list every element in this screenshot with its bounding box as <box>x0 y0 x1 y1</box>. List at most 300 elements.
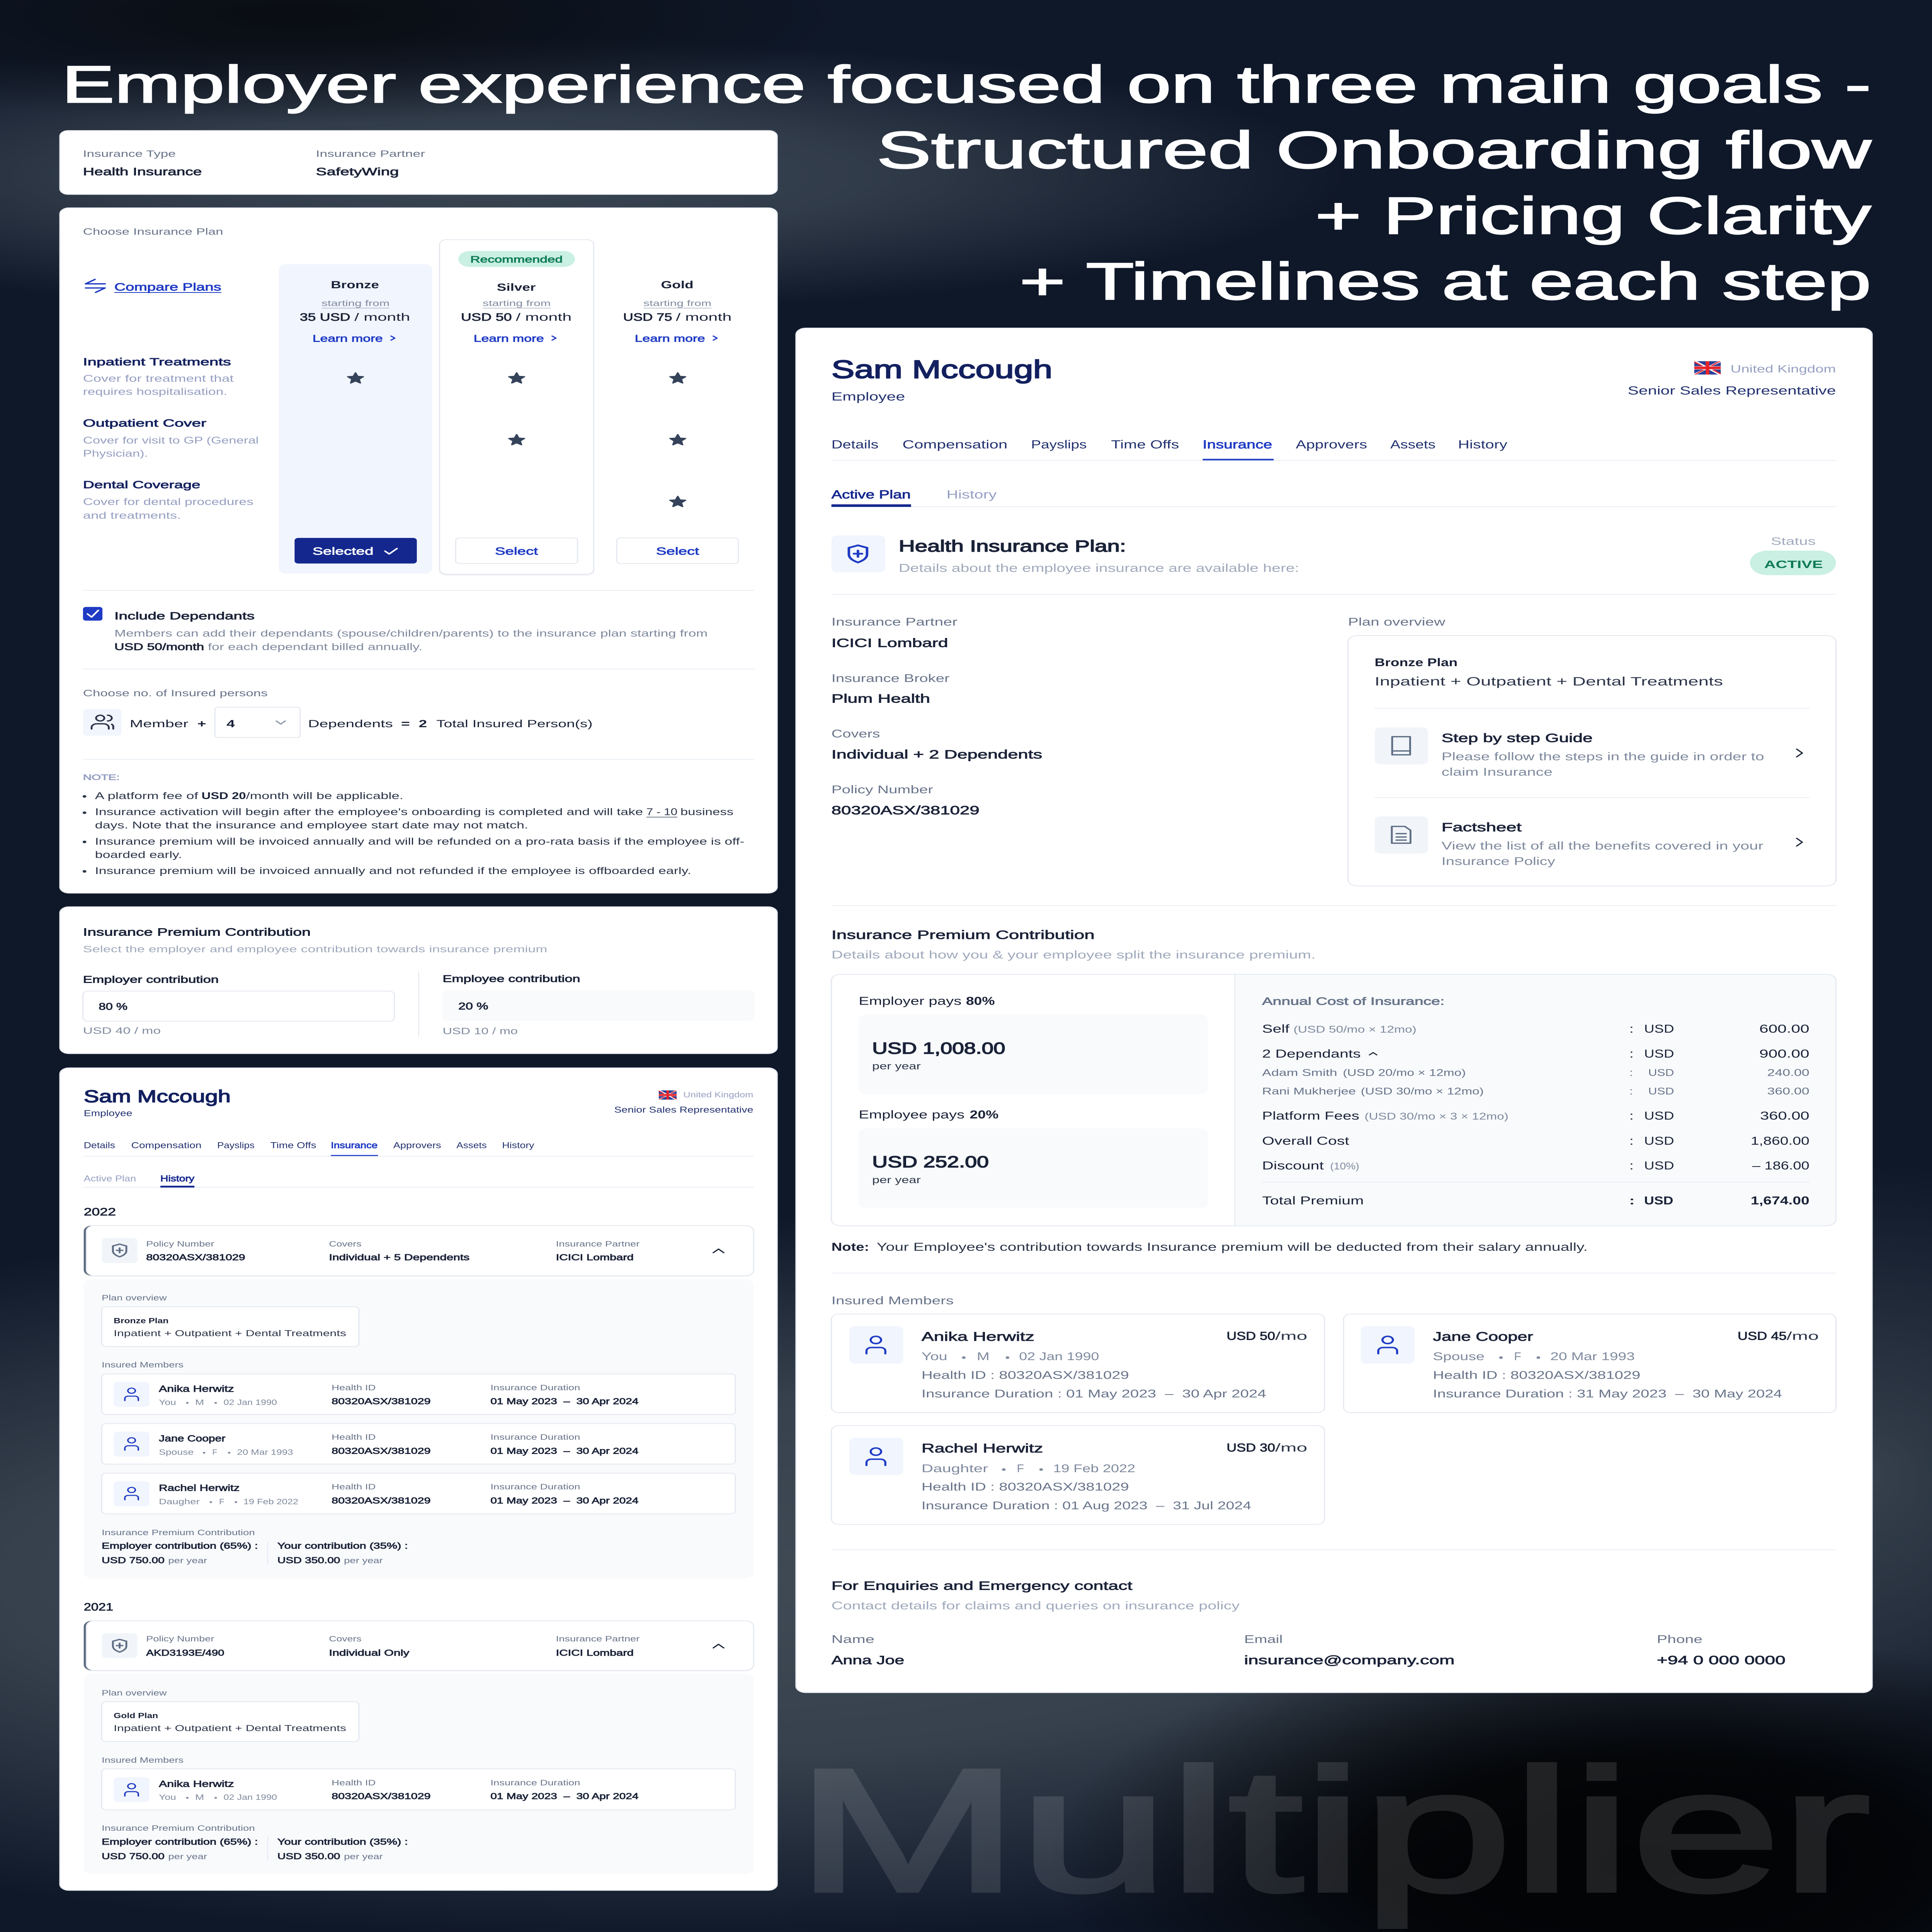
field: employee contribution: 20 % <box>458 1001 488 1012</box>
policy facts: Policy Number <box>832 783 933 796</box>
member card: Jane Cooper <box>1344 1314 1836 1413</box>
insured person selector: Total Insured Person(s) <box>436 718 592 730</box>
policy summary card: ICICI Lombard <box>556 1252 634 1262</box>
member card: Rachel Herwitz: USD 30 <box>1226 1441 1275 1454</box>
annual cost table: 360.00 <box>1760 1109 1810 1122</box>
policy facts: ICICI Lombard <box>832 636 948 650</box>
field: employer contribution: 80 % <box>99 1001 128 1012</box>
section heading: insurance premium contribution: Details about how you & your employee split the insurance premium. <box>832 949 1316 961</box>
plan column: silver: Select <box>495 546 538 557</box>
policy facts: Insurance Broker <box>832 672 950 684</box>
member card: Anika Herwitz: 02 Jan 1990 <box>1019 1350 1099 1363</box>
annual cost table: : <box>1629 1067 1633 1078</box>
insured person selector <box>83 688 592 738</box>
annual cost table: 2 Dependants <box>1262 1047 1361 1060</box>
plan column: bronze: Selected <box>313 546 374 557</box>
contribution split: Employer contribution (65%) : <box>102 1837 258 1847</box>
employer share <box>859 995 1208 1094</box>
sub tabs: History <box>160 1173 194 1183</box>
member row: Jane Cooper: Spouse <box>159 1448 194 1457</box>
plan heading: Health Insurance Plan: <box>899 537 1126 555</box>
navigation tabs: Time Offs <box>1111 438 1179 451</box>
member row: Anika Herwitz: Anika Herwitz <box>159 1779 234 1789</box>
plan column: gold: Learn more <box>635 333 705 344</box>
insured person selector: = <box>401 718 410 730</box>
history year 2021 <box>84 1601 753 1874</box>
contribution split: per year <box>168 1556 207 1565</box>
expanded policy details: Plan overview <box>102 1294 167 1302</box>
checkbox: include dependants: Include Dependants <box>114 611 255 622</box>
annual cost table: : <box>1629 1085 1633 1097</box>
member row: Anika Herwitz: 02 Jan 1990 <box>224 1793 277 1802</box>
note: Note: <box>832 1241 869 1253</box>
member row: Jane Cooper: 20 Mar 1993 <box>237 1448 293 1457</box>
member card: Rachel Herwitz: /mo <box>1275 1441 1307 1454</box>
insured members <box>832 1294 1836 1524</box>
expanded policy details: Insured Members <box>102 1361 184 1369</box>
contribution split: per year <box>344 1556 383 1565</box>
annual cost table <box>1262 995 1810 1207</box>
member card: Rachel Herwitz: Rachel Herwitz <box>922 1442 1043 1455</box>
history year 2021: 2021 <box>84 1601 113 1613</box>
heading: choose insurance plan: Choose Insurance Plan <box>83 227 223 237</box>
member card: Anika Herwitz: USD 50 <box>1226 1330 1275 1342</box>
plan column: bronze: 35 USD <box>300 311 350 323</box>
checkbox: include dependants: for each dependant billed annually. <box>208 641 422 652</box>
plan column: bronze <box>279 264 432 573</box>
expanded policy details <box>84 1279 753 1578</box>
title <box>62 55 1871 311</box>
contribution split: Your contribution (35%) : <box>277 1541 408 1551</box>
plan overview: Plan overview <box>1348 616 1446 628</box>
member card: Jane Cooper: Insurance Duration : 31 May 2023 – 30 May 2024 <box>1433 1388 1782 1400</box>
annual cost table: Annual Cost of Insurance: <box>1262 995 1444 1007</box>
employee header <box>84 1087 753 1118</box>
plan overview box: Gold Plan <box>114 1712 158 1720</box>
policy summary card: Policy Number <box>146 1634 214 1643</box>
premium breakdown <box>832 974 1836 1226</box>
guide link: Step by step Guide <box>1442 731 1593 745</box>
notes list: A platform fee of <box>95 790 198 801</box>
member row: Anika Herwitz: M <box>195 1398 204 1407</box>
employer share: 80% <box>966 995 995 1007</box>
member row: Jane Cooper: Health ID <box>332 1433 376 1442</box>
notes list: 7 - 10 <box>646 806 677 817</box>
member card: Rachel Herwitz: Insurance Duration : 01 Aug 2023 – 31 Jul 2024 <box>922 1499 1251 1512</box>
annual cost table: : <box>1629 1134 1634 1147</box>
navigation tabs: Details <box>84 1141 115 1150</box>
employer share: USD 1,008.00 <box>872 1039 1005 1057</box>
contribution split: Insurance Premium Contribution <box>102 1528 255 1537</box>
member card: Rachel Herwitz: Daughter <box>922 1462 988 1475</box>
notes list: Insurance premium will be invoiced annually and not refunded if the employee is offboarded early. <box>95 865 691 876</box>
sub tabs <box>84 1173 753 1187</box>
enquiries and emergency contact: Anna Joe <box>832 1654 904 1667</box>
checkbox: include dependants <box>83 607 707 652</box>
member row: Rachel Herwitz: Rachel Herwitz <box>159 1483 240 1493</box>
contribution split: USD 350.00 <box>277 1555 340 1565</box>
plan heading <box>832 535 1299 574</box>
plan column: gold <box>617 279 738 563</box>
employee share <box>859 1108 1208 1208</box>
member row: Jane Cooper <box>102 1423 735 1464</box>
member row: Rachel Herwitz: Health ID <box>332 1483 376 1492</box>
checkbox: include dependants: USD 50/month <box>114 641 204 652</box>
policy summary card: Individual Only <box>329 1648 410 1658</box>
navigation tabs: Details <box>832 438 879 451</box>
navigation tabs: Insurance <box>331 1141 378 1150</box>
navigation tabs: Compensation <box>131 1141 201 1150</box>
panel: insurance premium contribution form: Select the employer and employee contribution towards insurance premium <box>83 944 547 954</box>
annual cost table: (10%) <box>1330 1161 1359 1172</box>
benefit list: and treatments. <box>83 510 181 521</box>
annual cost table: USD <box>1644 1134 1674 1147</box>
annual cost table: USD <box>1648 1085 1674 1097</box>
icon: book <box>1392 737 1410 755</box>
annual cost table: USD <box>1644 1159 1674 1172</box>
employee header: Senior Sales Representative <box>1628 384 1836 397</box>
member row: Jane Cooper: F <box>213 1448 217 1457</box>
notes list <box>83 773 744 876</box>
annual cost table: 900.00 <box>1759 1047 1810 1060</box>
policy facts: Covers <box>832 728 880 740</box>
plan column: silver <box>439 240 594 576</box>
plan column: bronze: / month <box>354 311 410 323</box>
title: + Timelines at each step <box>1019 252 1871 311</box>
navigation tabs: Payslips <box>1031 438 1087 451</box>
status badge <box>1750 535 1836 575</box>
insured person selector: Choose no. of Insured persons <box>83 688 268 699</box>
plan column: silver: Recommended <box>470 255 563 265</box>
notes list: boarded early. <box>95 849 182 860</box>
plan overview box: Bronze Plan <box>114 1317 168 1325</box>
employee header: Employee <box>84 1109 132 1118</box>
member row: Anika Herwitz: Insurance Duration <box>490 1779 580 1787</box>
contribution split <box>102 1528 408 1565</box>
plan column: silver: starting from <box>483 299 551 308</box>
plan column: gold: / month <box>676 311 731 323</box>
insured person selector: 4 <box>226 718 235 730</box>
annual cost table: USD <box>1644 1022 1674 1035</box>
title: + Pricing Clarity <box>1315 187 1871 245</box>
plan overview box <box>102 1702 359 1742</box>
policy facts: Individual + 2 Dependents <box>832 748 1042 761</box>
annual cost table: : <box>1629 1159 1634 1172</box>
member row: Anika Herwitz: You <box>159 1793 176 1802</box>
member row: Anika Herwitz: Health ID <box>332 1779 376 1787</box>
plan column: silver: USD 50 <box>461 311 512 323</box>
member row: Rachel Herwitz: 80320ASX/381029 <box>332 1496 431 1505</box>
annual cost table: : <box>1629 1194 1635 1207</box>
benefit list: Cover for visit to GP (General <box>83 435 259 446</box>
member card: Rachel Herwitz: 19 Feb 2022 <box>1053 1462 1135 1475</box>
panel: insurance type and partner <box>60 131 777 194</box>
plan column: silver: Silver <box>497 282 536 293</box>
plan column: silver: / month <box>516 311 571 323</box>
contribution split: USD 750.00 <box>102 1851 165 1861</box>
annual cost table: USD <box>1644 1109 1674 1122</box>
navigation tabs: Payslips <box>217 1141 255 1150</box>
employee share: USD 252.00 <box>872 1153 989 1171</box>
sub tabs: History <box>947 488 997 501</box>
member card: Jane Cooper: /mo <box>1787 1330 1819 1342</box>
benefit list <box>83 356 259 521</box>
factsheet link: View the list of all the benefits covered in your <box>1442 840 1764 852</box>
annual cost table: 1,674.00 <box>1751 1194 1810 1207</box>
field: employee contribution: Employee contribution <box>443 973 580 984</box>
annual cost table: 360.00 <box>1767 1085 1810 1097</box>
plan column: bronze: Bronze <box>331 279 379 291</box>
icon: people <box>92 715 113 729</box>
employee header: United Kingdom <box>684 1090 753 1099</box>
plan overview: Inpatient + Outpatient + Dental Treatments <box>1374 675 1723 688</box>
member card: Jane Cooper: Spouse <box>1433 1350 1485 1363</box>
contribution split: USD 350.00 <box>277 1851 340 1861</box>
member card: Anika Herwitz: Health ID : 80320ASX/381029 <box>922 1369 1129 1381</box>
contribution split: Insurance Premium Contribution <box>102 1824 255 1833</box>
member row: Anika Herwitz: 02 Jan 1990 <box>224 1398 277 1407</box>
link: compare plans: Compare Plans <box>114 281 221 293</box>
member row: Jane Cooper: 80320ASX/381029 <box>332 1446 431 1456</box>
member row: Rachel Herwitz: Insurance Duration <box>490 1483 580 1492</box>
notes list: Insurance activation will begin after the employee's onboarding is completed and will take <box>95 806 643 817</box>
navigation tabs: History <box>1458 438 1507 451</box>
policy summary card: Covers <box>329 1240 362 1248</box>
member card: Anika Herwitz: Anika Herwitz <box>922 1330 1034 1344</box>
section heading: insurance premium contribution: Insurance Premium Contribution <box>832 928 1095 942</box>
annual cost table: (USD 20/mo × 12mo) <box>1343 1067 1466 1078</box>
insured members: Insured Members <box>832 1294 954 1307</box>
factsheet link: Factsheet <box>1442 821 1522 834</box>
notes list: NOTE: <box>83 773 120 782</box>
policy summary card <box>84 1226 753 1277</box>
insured person selector: Member <box>130 718 189 730</box>
policy facts: 80320ASX/381029 <box>832 804 980 817</box>
annual cost table: Discount <box>1262 1159 1324 1172</box>
insured person selector: 2 <box>419 718 427 730</box>
expanded policy details: Insured Members <box>102 1756 184 1765</box>
benefit list: Inpatient Treatments <box>83 356 231 368</box>
field: employer contribution <box>83 974 395 1036</box>
title: Structured Onboarding flow <box>877 121 1871 179</box>
policy summary card: AKD3193E/490 <box>146 1648 224 1658</box>
benefit list: Physician). <box>83 448 148 459</box>
member card: Rachel Herwitz: Health ID : 80320ASX/381029 <box>922 1481 1129 1493</box>
annual cost table: USD <box>1648 1067 1674 1078</box>
enquiries and emergency contact: +94 0 000 0000 <box>1657 1654 1786 1667</box>
enquiries and emergency contact: Email <box>1244 1633 1282 1646</box>
navigation tabs <box>832 438 1836 460</box>
plan column: gold: Gold <box>661 279 694 291</box>
member row: Anika Herwitz: You <box>159 1398 176 1407</box>
expanded policy details <box>84 1674 753 1874</box>
employee header: Sam Mccough <box>832 355 1052 384</box>
employee header: Senior Sales Representative <box>614 1105 753 1114</box>
member row: Jane Cooper: Insurance Duration <box>490 1433 580 1442</box>
annual cost table: Platform Fees <box>1262 1109 1359 1122</box>
sub tabs: Active Plan <box>832 488 911 501</box>
plan column: gold: starting from <box>643 299 711 308</box>
benefit list: Dental Coverage <box>83 479 201 491</box>
member card: Jane Cooper: USD 45 <box>1738 1330 1787 1342</box>
section heading: insurance premium contribution <box>832 928 1316 961</box>
notes list: USD 20 <box>201 790 246 801</box>
insured person selector: Dependents <box>308 718 393 730</box>
policy summary card: Covers <box>329 1634 362 1643</box>
panel: choose insurance plan <box>60 208 777 893</box>
employee header: Sam Mccough <box>84 1087 231 1106</box>
plan column: bronze: Learn more <box>313 333 383 344</box>
guide link: Please follow the steps in the guide in order to <box>1442 750 1764 763</box>
policy summary card: 80320ASX/381029 <box>146 1252 245 1262</box>
policy summary card: Insurance Partner <box>556 1240 639 1248</box>
navigation tabs: Insurance <box>1202 438 1272 451</box>
sub tabs: Active Plan <box>84 1173 136 1183</box>
annual cost table: (USD 30/mo × 12mo) <box>1361 1085 1484 1097</box>
panel: insurance premium contribution form <box>60 907 777 1054</box>
member row: Jane Cooper: Jane Cooper <box>159 1433 225 1443</box>
annual cost table: 240.00 <box>1767 1067 1810 1078</box>
employee share: Employee pays <box>859 1108 964 1121</box>
benefit list: Cover for treatment that <box>83 373 234 384</box>
title: Employer experience focused on three main goals - <box>62 55 1871 114</box>
insured person selector: + <box>197 718 206 730</box>
policy summary card <box>84 1621 753 1672</box>
plan overview box: Inpatient + Outpatient + Dental Treatments <box>114 1723 346 1733</box>
member card: Anika Herwitz: M <box>977 1350 990 1363</box>
member row: Anika Herwitz: Health ID <box>332 1383 376 1392</box>
annual cost table: (USD 50/mo × 12mo) <box>1294 1024 1417 1035</box>
enquiries and emergency contact: insurance@company.com <box>1244 1654 1455 1667</box>
panel: employee insurance active plan <box>796 328 1872 1693</box>
checkbox: include dependants: Members can add their dependants (spouse/children/parents) to the insurance plan starting from <box>114 628 707 639</box>
member card: Anika Herwitz: Insurance Duration : 01 May 2023 – 30 Apr 2024 <box>922 1388 1266 1400</box>
history year 2022 <box>84 1206 753 1578</box>
plan overview box: Inpatient + Outpatient + Dental Treatments <box>114 1328 346 1338</box>
member card: Jane Cooper: Jane Cooper <box>1433 1330 1533 1344</box>
policy summary card: Individual + 5 Dependents <box>329 1252 469 1262</box>
policy summary card: ICICI Lombard <box>556 1648 634 1658</box>
employer share: Employer pays <box>859 995 961 1007</box>
navigation tabs: Compensation <box>903 438 1007 451</box>
sub tabs <box>832 488 1836 507</box>
policy summary card: Insurance Partner <box>556 1634 639 1643</box>
benefit list: requires hospitalisation. <box>83 386 227 397</box>
panel: insurance premium contribution form: Insurance Premium Contribution <box>83 926 311 938</box>
field: employer contribution: Employer contribution <box>83 974 219 985</box>
contribution split: Your contribution (35%) : <box>277 1837 408 1847</box>
employee header <box>832 355 1836 403</box>
annual cost table: (USD 30/mo × 3 × 12mo) <box>1364 1111 1509 1122</box>
policy facts: Insurance Partner <box>832 616 957 628</box>
field: employee contribution: USD 10 / mo <box>443 1026 518 1036</box>
annual cost table: : <box>1629 1047 1634 1060</box>
contribution split <box>102 1824 408 1861</box>
enquiries and emergency contact: For Enquiries and Emergency contact <box>832 1579 1133 1593</box>
member card: Jane Cooper: F <box>1514 1350 1521 1363</box>
member row: Rachel Herwitz: 01 May 2023 – 30 Apr 2024 <box>490 1496 638 1505</box>
member card: Rachel Herwitz: F <box>1017 1462 1024 1475</box>
member card: Jane Cooper: Health ID : 80320ASX/381029 <box>1433 1369 1640 1381</box>
member row: Rachel Herwitz: F <box>219 1497 224 1506</box>
member row: Anika Herwitz: Insurance Duration <box>490 1383 580 1392</box>
annual cost table: USD <box>1644 1194 1673 1207</box>
member row: Rachel Herwitz <box>102 1473 735 1514</box>
notes list: business <box>680 806 733 817</box>
annual cost table: USD <box>1644 1047 1674 1060</box>
member row: Anika Herwitz: 80320ASX/381029 <box>332 1396 431 1406</box>
plan overview: Bronze Plan <box>1374 656 1458 668</box>
contribution split: Employer contribution (65%) : <box>102 1541 258 1551</box>
navigation tabs <box>84 1141 753 1156</box>
watermark: Multiplier: Multiplier <box>796 1733 1870 1929</box>
annual cost table: 600.00 <box>1759 1022 1810 1035</box>
annual cost table: Total Premium <box>1262 1194 1364 1207</box>
benefit list: Outpatient Cover <box>83 418 206 429</box>
annual cost table: Overall Cost <box>1262 1134 1349 1147</box>
field: employer contribution: USD 40 / mo <box>83 1026 161 1036</box>
annual cost table: Self <box>1262 1022 1290 1035</box>
member card: Anika Herwitz <box>832 1314 1325 1413</box>
member card: Anika Herwitz: /mo <box>1275 1330 1307 1342</box>
note: Your Employee's contribution towards Insurance premium will be deducted from their salary annually. <box>877 1241 1588 1253</box>
member row: Anika Herwitz: Anika Herwitz <box>159 1384 234 1394</box>
annual cost table: – 186.00 <box>1752 1159 1810 1172</box>
guide link <box>1374 728 1802 778</box>
employee header: Employee <box>832 390 905 403</box>
plan column: bronze: starting from <box>321 299 389 308</box>
annual cost table: Adam Smith <box>1262 1067 1337 1078</box>
plan column: silver: Learn more <box>474 333 544 344</box>
benefit list: Cover for dental procedures <box>83 497 253 507</box>
member card: Jane Cooper: 20 Mar 1993 <box>1550 1350 1635 1363</box>
history year 2022: 2022 <box>84 1206 116 1218</box>
policy facts: Plum Health <box>832 692 930 706</box>
notes list: Insurance premium will be invoiced annually and will be refunded on a pro-rata basis if the employee is off- <box>95 836 744 847</box>
policy summary card: Policy Number <box>146 1240 214 1248</box>
plan heading: Details about the employee insurance are available here: <box>899 561 1299 574</box>
panel: insurance type and partner: SafetyWing <box>316 166 399 178</box>
employee header: United Kingdom <box>1731 363 1836 375</box>
expanded policy details: Plan overview <box>102 1689 167 1697</box>
plan column: gold: Select <box>656 546 699 557</box>
employer share: per year <box>872 1060 921 1071</box>
notes list: days. Note that the insurance and employee start date may not match. <box>95 820 528 831</box>
navigation tabs: Time Offs <box>270 1141 316 1150</box>
icon: compare arrows <box>86 279 105 293</box>
annual cost table: 1,860.00 <box>1751 1134 1810 1147</box>
employee share: 20% <box>970 1108 998 1121</box>
enquiries and emergency contact: Contact details for claims and queries on insurance policy <box>832 1599 1240 1612</box>
member row: Rachel Herwitz: Daugher <box>159 1497 200 1506</box>
member row: Anika Herwitz: 01 May 2023 – 30 Apr 2024 <box>490 1791 638 1801</box>
member row: Anika Herwitz <box>102 1769 735 1810</box>
plan column: gold: USD 75 <box>623 311 672 323</box>
enquiries and emergency contact: Name <box>832 1633 874 1646</box>
guide link: claim Insurance <box>1442 766 1553 778</box>
navigation tabs: Assets <box>1390 438 1435 451</box>
contribution split: USD 750.00 <box>102 1555 165 1565</box>
member row: Anika Herwitz <box>102 1374 735 1415</box>
annual cost table: : <box>1629 1022 1634 1035</box>
notes list: /month will be applicable. <box>246 790 403 801</box>
field: employee contribution <box>443 973 754 1036</box>
panel: insurance type and partner: Health Insurance <box>83 166 202 178</box>
member row: Rachel Herwitz: 19 Feb 2022 <box>243 1497 298 1506</box>
factsheet link <box>1374 816 1802 867</box>
member row: Anika Herwitz: 80320ASX/381029 <box>332 1791 431 1801</box>
contribution split: per year <box>168 1852 207 1861</box>
